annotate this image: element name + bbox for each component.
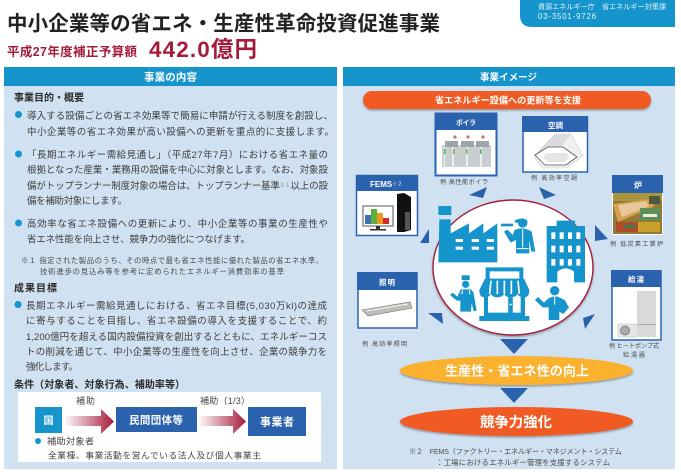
subsidy flow diagram bbox=[18, 392, 321, 462]
box: government bbox=[35, 407, 62, 433]
ellipse: productivity improvement bbox=[400, 356, 633, 385]
boiler image bbox=[442, 135, 491, 167]
arrow: circle to productivity bbox=[500, 339, 528, 354]
subsidy flow diagram: 補助 bbox=[76, 395, 95, 406]
budget line bbox=[7, 37, 257, 62]
bullet: competitiveness bbox=[15, 218, 328, 246]
card: lighting: 照明 bbox=[379, 278, 396, 287]
card: FEMS: ※２ bbox=[392, 182, 402, 188]
ellipse: productivity improvement: 生産性・省エネ性の向上 bbox=[445, 364, 589, 378]
ellipse: competitiveness: 競争力強化 bbox=[480, 414, 553, 431]
icon: shop bbox=[479, 267, 529, 321]
caption: lighting: 例 高効率照明 bbox=[362, 340, 407, 348]
heading: purpose: 事業目的・概要 bbox=[14, 91, 84, 104]
bullet: simplified application bbox=[15, 110, 334, 138]
bullet: target outcome bbox=[14, 300, 327, 373]
icon: factory worker bbox=[501, 218, 535, 253]
card: lighting bbox=[357, 272, 417, 328]
footnote 1 bbox=[21, 256, 323, 276]
contact box bbox=[520, 0, 675, 27]
arrow: to businesses bbox=[198, 409, 246, 434]
card: air conditioning bbox=[522, 116, 588, 172]
panel: project content bbox=[4, 67, 337, 469]
title: 中小企業等の省エネ・生産性革命投資促進事業 bbox=[7, 12, 440, 36]
bullet: long-term outlook: 以上の設 bbox=[290, 181, 328, 192]
bullet: simplified application: 導入する設備ごとの省エネ効果等で簡易に申請が行える制度を創設し、 bbox=[27, 110, 333, 122]
caption: hot water bbox=[609, 342, 659, 359]
bullet: long-term outlook: 備がトップランナー制度対象の場合は、トップランナー基準 bbox=[27, 181, 280, 192]
caption: air conditioning: 例 高効率空調 bbox=[531, 174, 577, 182]
footnote 1: 技術進歩の見込み等を参考に定められたエネルギー消費効率の基準 bbox=[40, 267, 285, 276]
caption: hot water: 例 ヒートポンプ式 bbox=[609, 342, 659, 350]
panel header: project image: 事業イメージ bbox=[480, 72, 537, 84]
budget line: 442.0億円 bbox=[149, 37, 257, 62]
card: hot water: 給湯 bbox=[628, 274, 644, 284]
footnote 2: ※２ FEMS（ファクトリー・エネルギー・マネジメント・システム bbox=[409, 447, 622, 456]
light fixture image bbox=[362, 302, 412, 316]
panel header: project image bbox=[343, 67, 675, 86]
icon: businessman bbox=[535, 286, 569, 320]
footnote 2 bbox=[409, 447, 622, 467]
eligible recipients: 補助対象者 bbox=[47, 436, 94, 446]
ellipse: competitiveness bbox=[400, 407, 633, 436]
arrow: to organisations bbox=[64, 409, 114, 434]
box: businesses bbox=[248, 407, 306, 436]
footnote 2: ：工場におけるエネルギー管理を支援するシステム bbox=[436, 458, 610, 467]
support banner: 省エネルギー設備への更新等を支援 bbox=[435, 94, 581, 106]
bullet: target outcome: 強化します。 bbox=[26, 361, 78, 373]
icon: office building bbox=[547, 221, 585, 282]
box: businesses: 事業者 bbox=[260, 414, 294, 428]
circle with businesses bbox=[433, 200, 593, 335]
bullet: competitiveness: 高効率な省エネ設備への更新により、中小企業等の事業の生産性や bbox=[27, 218, 328, 230]
bullet: target outcome: 長期エネルギー需給見通しにおける、省エネ目標(5,030万kl)の達成 bbox=[26, 300, 327, 312]
bullet: long-term outlook: 備を補助対象にします。 bbox=[27, 195, 127, 207]
bullet: long-term outlook: ※１ bbox=[280, 182, 291, 189]
eligible recipients: 全業種、事業活動を営んでいる法人及び個人事業主 bbox=[48, 450, 261, 460]
bullet: long-term outlook: 「長期エネルギー需給見通し」（平成27年7月）における省エネ量の bbox=[27, 149, 328, 161]
subsidy flow diagram: 補助（1/3） bbox=[200, 395, 250, 406]
bullet: competitiveness: 省エネ性能を向上させ、競争力の強化につなげます。 bbox=[27, 234, 250, 246]
bullet: long-term outlook bbox=[15, 149, 328, 207]
panel header: project content: 事業の内容 bbox=[144, 70, 198, 84]
arrow: productivity to competitiveness bbox=[500, 388, 528, 403]
heat pump image bbox=[618, 291, 656, 337]
icon: chef bbox=[450, 275, 477, 312]
eligible recipients bbox=[35, 436, 261, 460]
contact box: 資源エネルギー庁 省エネルギー対策課 bbox=[538, 2, 666, 11]
budget line: 平成27年度補正予算額 bbox=[7, 44, 137, 59]
panel: project image bbox=[343, 67, 675, 469]
support banner bbox=[363, 91, 651, 109]
bullet: target outcome: に寄与することを目指し、省エネ設備の導入を支援することで、約 bbox=[26, 315, 327, 327]
air conditioner image bbox=[534, 134, 583, 168]
card: FEMS bbox=[356, 175, 418, 236]
panel header: project content bbox=[4, 67, 337, 86]
furnace photo bbox=[613, 193, 662, 234]
card: air conditioning: 空調 bbox=[548, 120, 564, 130]
bullet: target outcome: トの削減を通じて、中小企業等の生産性を向上させ、企業の競争力を bbox=[26, 346, 327, 358]
heading: conditions: 条件（対象者、対象行為、補助率等） bbox=[14, 378, 185, 391]
arrows around the circle bbox=[420, 187, 608, 329]
card: furnace bbox=[612, 175, 663, 235]
card: FEMS: FEMS bbox=[370, 180, 392, 189]
footnote 1: ※１ 指定された製品のうち、その時点で最も省エネ性能に優れた製品の省エネ水準、 bbox=[21, 256, 323, 265]
contact box: 03-3501-9726 bbox=[538, 12, 596, 21]
icon: factory bbox=[438, 206, 497, 262]
bullet: target outcome: 1,200億円を超える国内設備投資を創出するとともに、エネルギーコス bbox=[26, 331, 327, 343]
card: hot water bbox=[611, 270, 661, 340]
box: private organisations: 民間団体等 bbox=[129, 414, 184, 426]
card: boiler: ボイラ bbox=[456, 118, 476, 127]
bullet: simplified application: 中小企業等の省エネ効果が高い設備への更新を重点的に支援します。 bbox=[27, 126, 334, 138]
heading: target: 成果目標 bbox=[14, 282, 57, 294]
box: private organisations bbox=[116, 407, 197, 432]
box: government: 国 bbox=[44, 415, 54, 427]
caption: hot water: 給湯器 bbox=[623, 351, 646, 359]
card: boiler bbox=[435, 113, 497, 176]
card: furnace: 炉 bbox=[634, 180, 642, 190]
caption: boiler: 例 高性能ボイラ bbox=[440, 178, 488, 186]
monitor and PC icon bbox=[363, 193, 411, 232]
caption: furnace: 例 低炭素工業炉 bbox=[610, 240, 663, 248]
bullet: long-term outlook: 根拠となった産業・業務用の設備を中心に対象とします。なお、対象設 bbox=[27, 164, 328, 176]
